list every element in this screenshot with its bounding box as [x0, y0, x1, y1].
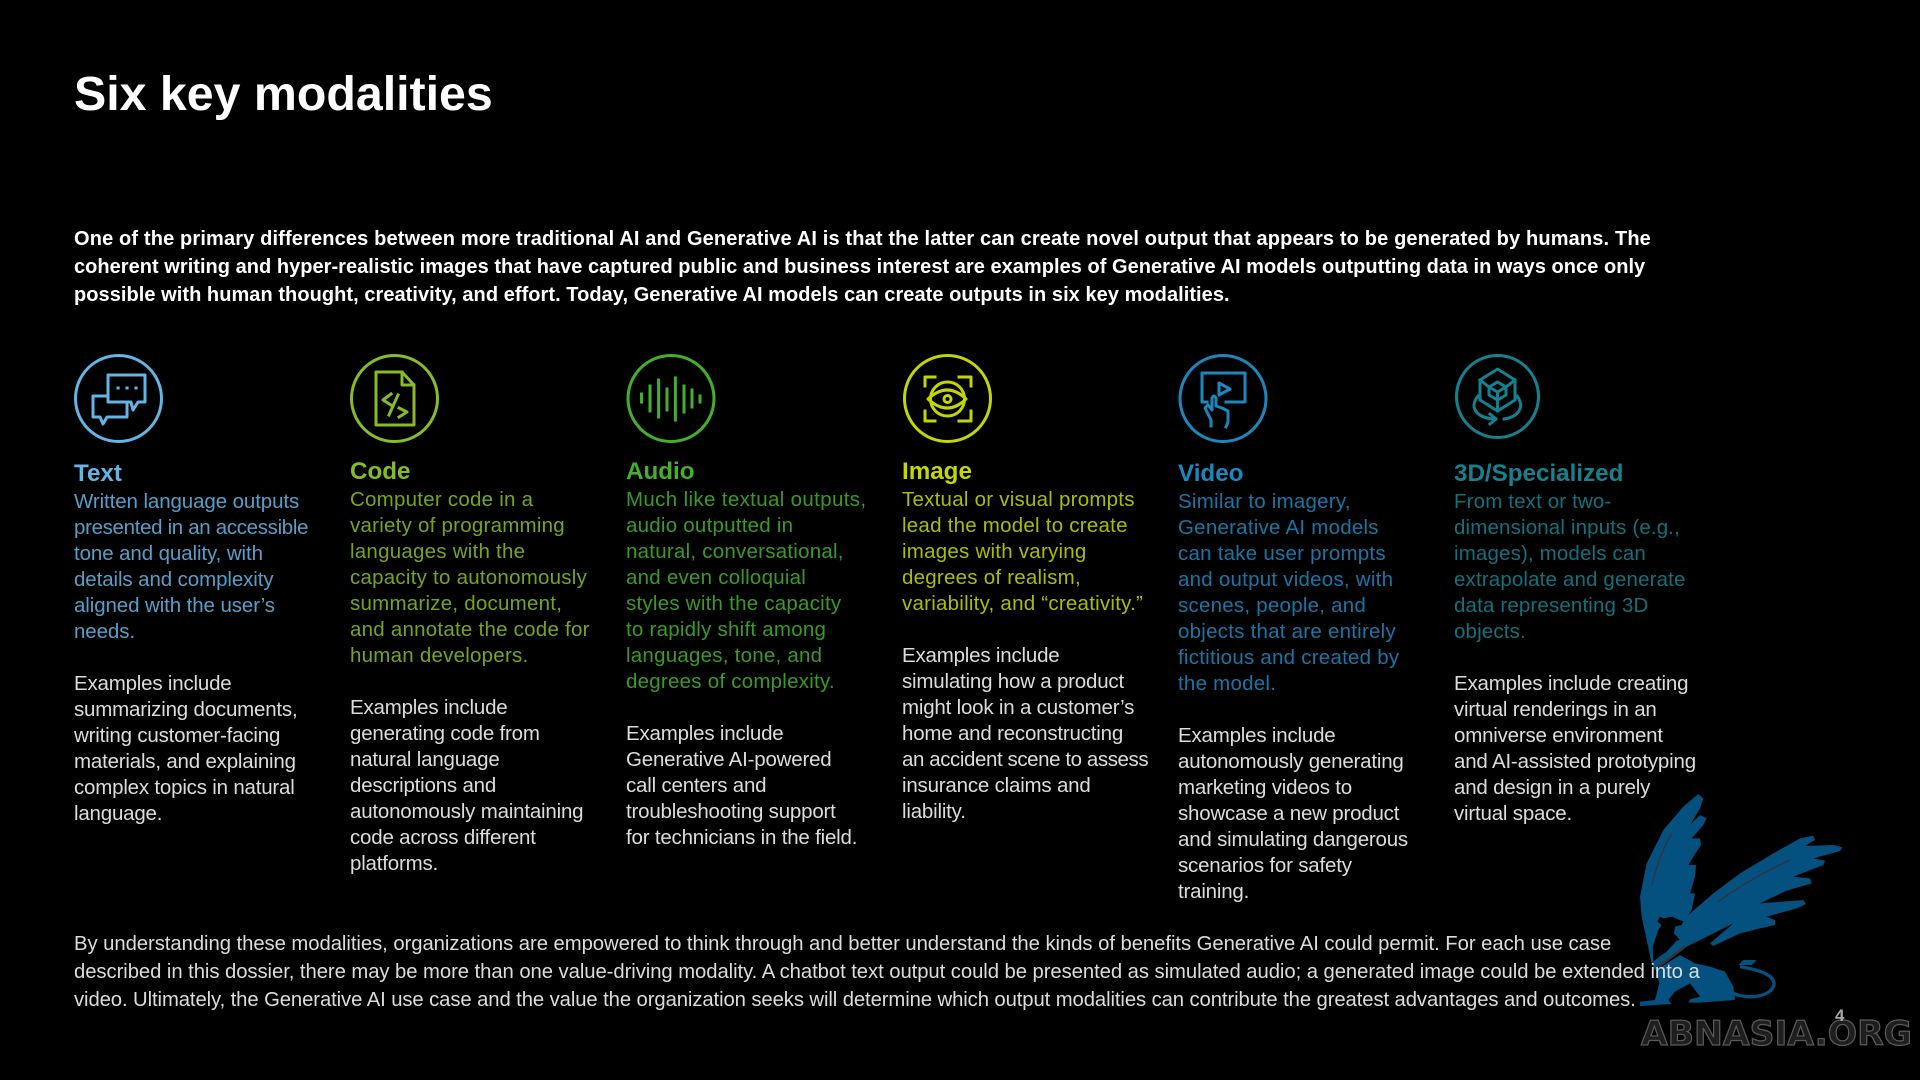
- icon: eye in viewfinder: [903, 354, 992, 443]
- text block: Audio description: languages, tone, and: [626, 644, 822, 667]
- page number: 4: [1835, 1006, 1845, 1025]
- panel: image modality: [902, 354, 1148, 823]
- heading: Audio: Audio: [626, 458, 695, 485]
- text block: Code description: languages with the: [350, 540, 525, 563]
- panel: code modality: [350, 354, 590, 875]
- heading: Text: Text: [74, 460, 122, 487]
- text block: Text description: language.: [74, 802, 162, 825]
- text block: Video description: training.: [1178, 880, 1249, 903]
- text block: Video description: the model.: [1178, 672, 1276, 695]
- text block: Text description: Examples include: [74, 672, 231, 695]
- text block: Text description: Written language outputs: [74, 490, 299, 513]
- text block: Code description: summarize, document,: [350, 592, 562, 615]
- text block: 3D/Specialized description: extrapolate and generate: [1454, 568, 1686, 591]
- text block: Image description: Textual or visual prompts: [902, 488, 1135, 511]
- text block: Image description: simulating how a product: [902, 670, 1124, 693]
- text block: 3D/Specialized description: omniverse environment: [1454, 724, 1663, 747]
- text block: Image description: home and reconstructing: [902, 722, 1123, 745]
- panel: audio modality: [626, 354, 866, 849]
- text block: Code description: platforms.: [350, 852, 438, 875]
- icon: code file: [350, 354, 439, 443]
- closing paragraph: described in this dossier, there may be more than one value-driving modality. A chatbot text output could be presented as simulated audio; a generated image could be extended into a: [74, 961, 1700, 983]
- text block: Video description: Similar to imagery,: [1178, 490, 1351, 513]
- text block: Image description: lead the model to create: [902, 514, 1128, 537]
- panel: video modality: [1178, 354, 1408, 903]
- icon: sound waveform: [626, 354, 716, 443]
- text block: Image description: variability, and “creativity.”: [902, 592, 1143, 615]
- text block: Video description: Generative AI models: [1178, 516, 1379, 539]
- text block: Code description: natural language: [350, 748, 500, 771]
- text block: Code description: Examples include: [350, 696, 507, 719]
- heading: Video: Video: [1178, 460, 1243, 487]
- text block: Audio description: for technicians in the field.: [626, 826, 857, 849]
- title: Six key modalities: [74, 67, 493, 121]
- text block: Audio description: styles with the capacity: [626, 592, 841, 615]
- closing paragraph: [74, 933, 1700, 1011]
- text block: 3D/Specialized description: virtual renderings in an: [1454, 698, 1657, 721]
- text block: 3D/Specialized description: and AI-assisted prototyping: [1454, 750, 1696, 773]
- text block: 3D/Specialized description: objects.: [1454, 620, 1526, 643]
- text block: Code description: descriptions and: [350, 774, 496, 797]
- wordmark: ABNASIA.ORG: [1641, 1014, 1912, 1054]
- text block: Audio description: Generative AI-powered: [626, 748, 831, 771]
- text block: Text description: [74, 490, 308, 825]
- text block: Video description: autonomously generating: [1178, 750, 1404, 773]
- text block: Text description: aligned with the user’s: [74, 594, 275, 617]
- text block: Image description: an accident scene to assess: [902, 748, 1148, 771]
- text block: Video description: and output videos, with: [1178, 568, 1393, 591]
- text block: Video description: can take user prompts: [1178, 542, 1386, 565]
- watermark wordmark and page number: [1640, 1006, 1912, 1054]
- text block: 3D/Specialized description: and design in a purely: [1454, 776, 1650, 799]
- heading: Code: Code: [350, 458, 410, 485]
- text block: Image description: insurance claims and: [902, 774, 1091, 797]
- text block: 3D/Specialized description: dimensional inputs (e.g.,: [1454, 516, 1680, 539]
- closing paragraph: By understanding these modalities, organizations are empowered to think through and better understand the kinds of benefits Generative AI could permit. For each use case: [74, 933, 1611, 955]
- text block: 3D/Specialized description: data representing 3D: [1454, 594, 1648, 617]
- text block: Video description: Examples include: [1178, 724, 1335, 747]
- icon: rotating cube: [1455, 354, 1540, 439]
- text block: Text description: details and complexity: [74, 568, 274, 591]
- panel: text modality: [74, 354, 308, 825]
- text block: 3D/Specialized description: virtual space.: [1454, 802, 1572, 825]
- text block: Code description: [350, 488, 590, 875]
- text block: Text description: complex topics in natural: [74, 776, 295, 799]
- text block: Text description: needs.: [74, 620, 135, 643]
- text block: Video description: [1178, 490, 1408, 903]
- text block: Code description: autonomously maintaining: [350, 800, 583, 823]
- text block: Audio description: degrees of complexity.: [626, 670, 835, 693]
- text block: Video description: scenarios for safety: [1178, 854, 1352, 877]
- text block: Text description: materials, and explaining: [74, 750, 296, 773]
- text block: Text description: presented in an accessible: [74, 516, 308, 539]
- text block: 3D/Specialized description: Examples include creating: [1454, 672, 1688, 695]
- text block: Text description: summarizing documents,: [74, 698, 297, 721]
- text block: Code description: capacity to autonomously: [350, 566, 587, 589]
- text block: Image description: degrees of realism,: [902, 566, 1081, 589]
- text block: Code description: human developers.: [350, 644, 528, 667]
- text block: Video description: marketing videos to: [1178, 776, 1352, 799]
- intro paragraph: possible with human thought, creativity, and effort. Today, Generative AI models can create outputs in six key modalities.: [74, 284, 1230, 306]
- text block: Code description: generating code from: [350, 722, 540, 745]
- text block: Video description: and simulating dangerous: [1178, 828, 1408, 851]
- text block: Audio description: to rapidly shift among: [626, 618, 826, 641]
- text block: Image description: [902, 488, 1148, 823]
- text block: Code description: and annotate the code for: [350, 618, 590, 641]
- text block: Video description: scenes, people, and: [1178, 594, 1366, 617]
- text block: 3D/Specialized description: From text or two-: [1454, 490, 1611, 513]
- text block: Audio description: natural, conversational,: [626, 540, 844, 563]
- icon: speech bubbles: [74, 354, 163, 443]
- icon: touch video screen: [1178, 354, 1268, 443]
- intro paragraph: [74, 228, 1651, 306]
- text block: Text description: tone and quality, with: [74, 542, 263, 565]
- text block: Audio description: [626, 488, 866, 849]
- text block: Video description: objects that are entirely: [1178, 620, 1396, 643]
- text block: Audio description: call centers and: [626, 774, 766, 797]
- text block: 3D/Specialized description: [1454, 490, 1696, 825]
- intro paragraph: coherent writing and hyper-realistic images that have captured public and business interest are examples of Generative AI models outputting data in ways once only: [74, 256, 1645, 278]
- text block: Audio description: troubleshooting support: [626, 800, 836, 823]
- closing paragraph: video. Ultimately, the Generative AI use case and the value the organization seeks will determine which output modalities can contribute the greatest advantages and outcomes.: [74, 989, 1636, 1011]
- text block: Code description: variety of programming: [350, 514, 565, 537]
- heading: Image: Image: [902, 458, 972, 485]
- text block: Audio description: audio outputted in: [626, 514, 793, 537]
- text block: Image description: might look in a customer’s: [902, 696, 1134, 719]
- text block: Image description: liability.: [902, 800, 966, 823]
- text block: Video description: fictitious and created by: [1178, 646, 1399, 669]
- text block: Image description: images with varying: [902, 540, 1087, 563]
- text block: Code description: code across different: [350, 826, 536, 849]
- intro paragraph: One of the primary differences between more traditional AI and Generative AI is that the latter can create novel output that appears to be generated by humans. The: [74, 228, 1651, 250]
- text block: Audio description: and even colloquial: [626, 566, 806, 589]
- text block: Code description: Computer code in a: [350, 488, 533, 511]
- griffin logo watermark: [1640, 794, 1843, 1006]
- text block: Image description: Examples include: [902, 644, 1059, 667]
- heading: 3D/Specialized: 3D/Specialized: [1454, 460, 1623, 487]
- text block: Text description: writing customer-facing: [74, 724, 280, 747]
- text block: 3D/Specialized description: images), models can: [1454, 542, 1646, 565]
- text block: Audio description: Examples include: [626, 722, 783, 745]
- panel: 3D/specialized modality: [1454, 354, 1696, 825]
- text block: Audio description: Much like textual outputs,: [626, 488, 866, 511]
- text block: Video description: showcase a new product: [1178, 802, 1399, 825]
